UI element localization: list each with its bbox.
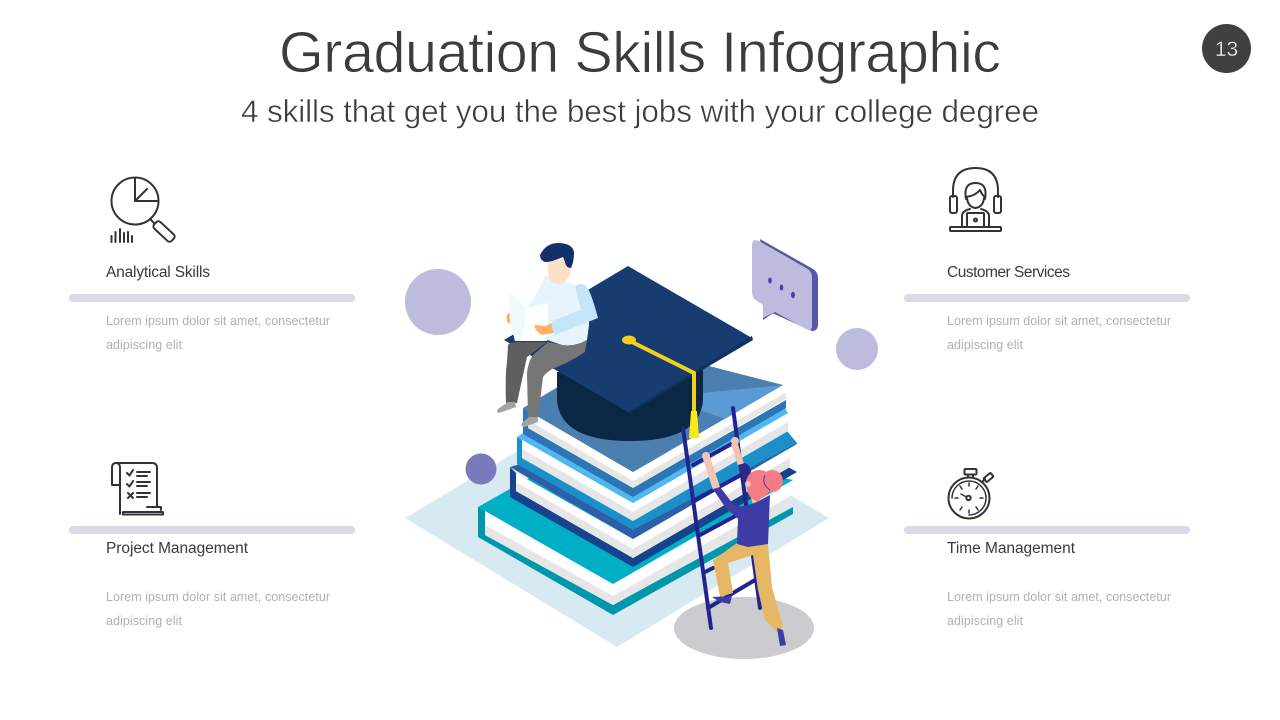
sleeve	[552, 284, 598, 335]
sweater	[713, 487, 770, 547]
subtitle: 4 skills that get you the best jobs with your college degree	[241, 93, 1039, 129]
hair	[540, 243, 574, 268]
heading: project management: Project Management	[106, 540, 249, 557]
text block: Lorem ipsum dolor sit amet, consectetur	[106, 590, 330, 604]
text block: Lorem ipsum dolor sit amet, consectetur	[106, 314, 330, 328]
divider bar	[69, 294, 355, 302]
book: teal bottom	[478, 438, 793, 615]
text block	[947, 590, 1171, 628]
panel: time management	[904, 469, 1190, 628]
divider bar	[69, 526, 355, 534]
hair	[745, 470, 783, 502]
speech bubble	[752, 239, 818, 331]
panel: customer services	[904, 168, 1190, 352]
circle: small lavender	[836, 328, 878, 370]
text block: Lorem ipsum dolor sit amet, consectetur	[947, 590, 1171, 604]
left arm	[703, 457, 720, 490]
man reading	[497, 243, 598, 427]
panel: project management	[69, 463, 355, 628]
icon: checklist scroll	[112, 463, 163, 514]
back shoe	[497, 402, 516, 413]
left hand	[506, 312, 514, 324]
book: top with cover	[523, 345, 787, 497]
text block: adipiscing elit	[106, 614, 183, 628]
text block	[947, 314, 1171, 352]
tassel	[622, 336, 699, 438]
right hand	[534, 322, 556, 335]
newspaper	[509, 293, 548, 341]
shoes	[712, 596, 786, 646]
front shoe	[521, 417, 538, 427]
divider bar	[904, 294, 1190, 302]
heading: analytical skills: Analytical Skills	[106, 264, 210, 281]
girl climbing	[702, 437, 786, 646]
dark sleeve	[738, 463, 751, 487]
text block: adipiscing elit	[106, 338, 183, 352]
pants	[713, 543, 783, 632]
heading: time management: Time Management	[947, 540, 1076, 557]
text block: adipiscing elit	[947, 338, 1024, 352]
page number badge	[1202, 24, 1251, 73]
heading: customer services: Customer Services	[947, 264, 1070, 281]
right arm	[731, 444, 744, 466]
book: blue	[517, 405, 797, 530]
circle: purple	[466, 454, 496, 484]
book: navy	[510, 431, 797, 567]
back leg	[506, 342, 547, 403]
circle: large lavender	[405, 269, 471, 335]
graduation cap	[504, 266, 753, 441]
text block: adipiscing elit	[947, 614, 1024, 628]
panel: analytical skills	[69, 178, 355, 352]
text block	[106, 314, 330, 352]
neck	[749, 490, 760, 505]
grey floor ellipse	[674, 597, 814, 659]
icon: magnifier over pie chart	[112, 178, 176, 243]
page number badge: 13	[1215, 38, 1238, 61]
ladder	[683, 408, 760, 628]
face	[547, 259, 571, 284]
title: Graduation Skills Infographic	[279, 21, 1001, 85]
central illustration: graduation book stack	[405, 239, 878, 659]
icon: headset agent at laptop	[950, 168, 1001, 231]
torso	[528, 275, 589, 345]
icon: stopwatch	[948, 469, 994, 518]
text block: Lorem ipsum dolor sit amet, consectetur	[947, 314, 1171, 328]
front leg	[527, 340, 587, 418]
ground diamond	[405, 392, 829, 647]
text block	[106, 590, 330, 628]
divider bar	[904, 526, 1190, 534]
